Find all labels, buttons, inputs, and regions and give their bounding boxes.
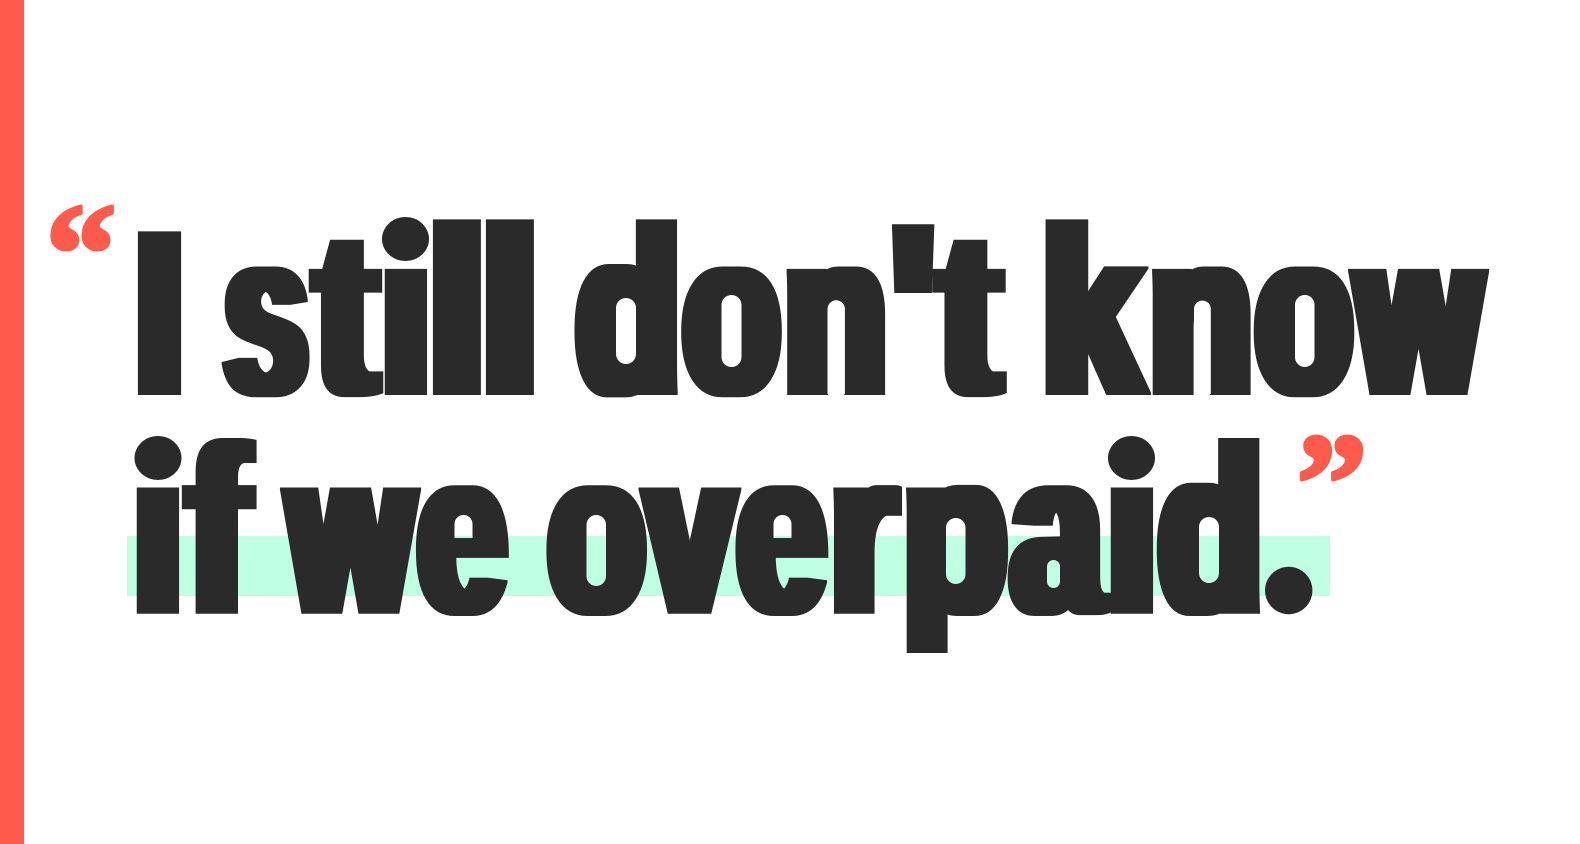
quote line 1 [138, 219, 1490, 398]
quote line 1: d [577, 177, 680, 445]
quote line 2: e [738, 401, 825, 663]
letter counters [449, 285, 1319, 596]
quote line 1: t [315, 181, 377, 444]
quote line 2 [136, 438, 1260, 653]
quote line 2: v [647, 401, 733, 663]
quote line 1: I [135, 181, 184, 444]
quote line 1: o [684, 183, 779, 445]
quote line 1: t [939, 181, 1000, 444]
round letter dots [134, 217, 1312, 614]
accent bar [0, 0, 24, 844]
quote line 1: l [427, 177, 487, 445]
quote line 1: o [1257, 183, 1351, 445]
opening quotation mark: “ [46, 174, 116, 332]
quote line 2: i [1107, 402, 1157, 663]
quote line 1: s [225, 182, 307, 444]
quote line 2: w [289, 401, 412, 663]
quote line 1: k [1042, 177, 1143, 445]
quote line 1: l [480, 177, 540, 445]
highlight band [127, 536, 1330, 596]
quote line 2: r [831, 400, 896, 663]
quote line 2: . [1276, 457, 1302, 640]
quote line 2: i [133, 402, 183, 663]
quote line 1: n [785, 183, 886, 445]
quote line 2: e [419, 401, 505, 663]
quote line 1: i [381, 183, 431, 445]
quote line 2: o [549, 401, 644, 663]
quote line 1: n [1150, 183, 1252, 445]
quote line 2: f [188, 396, 248, 664]
quote line 1: w [1357, 183, 1480, 445]
quote line 2: d [1159, 395, 1262, 664]
quote line 2: p [904, 402, 1006, 663]
closing quotation mark: ” [1296, 404, 1368, 562]
quote line 1: ' [891, 167, 935, 467]
quote line 2: a [1012, 400, 1103, 663]
